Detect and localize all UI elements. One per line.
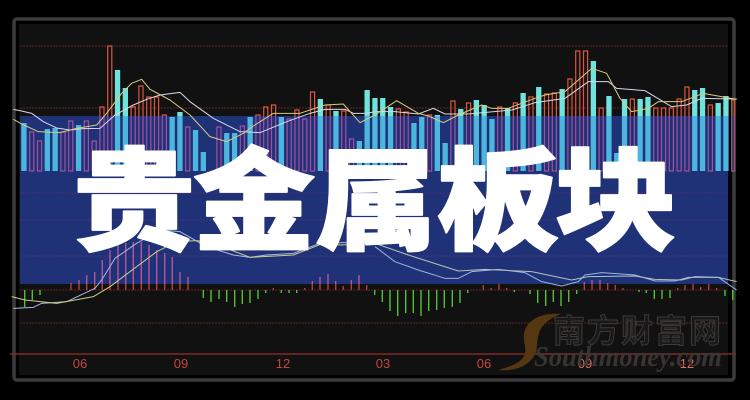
moving average lines: upper chart bbox=[13, 68, 737, 142]
MACD histogram bbox=[25, 242, 733, 316]
time axis labels: 06 bbox=[73, 356, 87, 371]
watermark: site url: Southmoney.com bbox=[534, 341, 722, 373]
time axis labels: 12 bbox=[680, 356, 694, 371]
time axis labels: 09 bbox=[578, 356, 592, 371]
time axis labels: 12 bbox=[276, 356, 290, 371]
volume bar chart bbox=[21, 46, 735, 171]
watermark: swoosh logo bbox=[498, 314, 561, 370]
time axis labels: 09 bbox=[174, 356, 188, 371]
time axis labels bbox=[73, 356, 694, 371]
grid lines bbox=[10, 46, 736, 354]
time axis labels: 03 bbox=[376, 356, 390, 371]
title: 贵金属板块 bbox=[73, 140, 677, 264]
blue title band bbox=[20, 116, 728, 284]
time axis labels: 06 bbox=[477, 356, 491, 371]
MACD lines bbox=[12, 230, 737, 308]
watermark: site name: 南方财富网 bbox=[553, 313, 721, 349]
